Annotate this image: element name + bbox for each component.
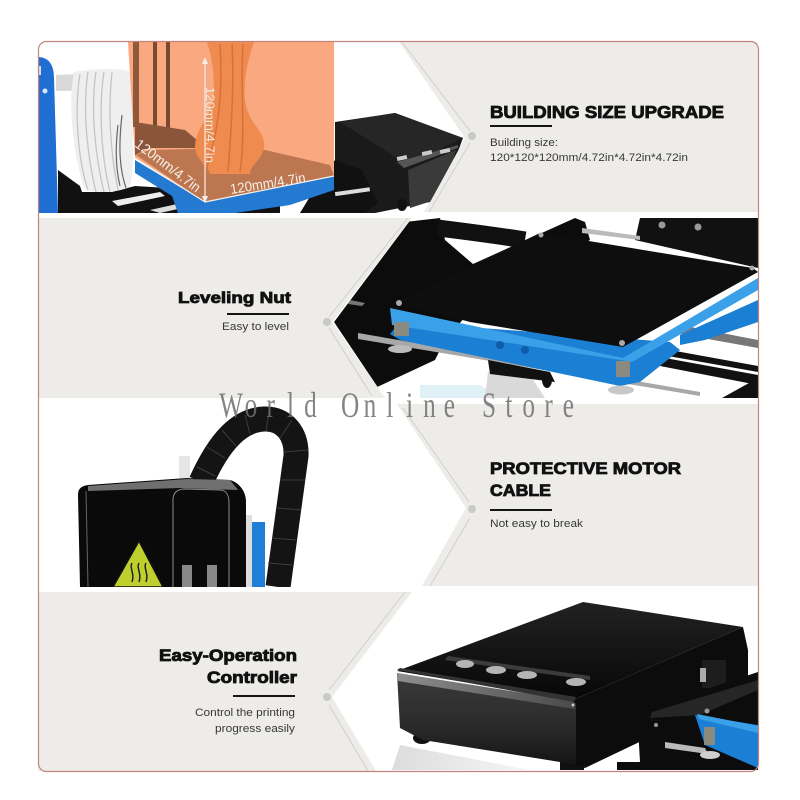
arrow: row 3 pointer: [403, 408, 476, 586]
arrow: row 4 pointer: [323, 592, 405, 771]
heading: easy-operation controller: Controller: [207, 669, 298, 687]
watermark: World Online Store: World Online Store: [219, 385, 574, 425]
heading: protective motor cable: [490, 460, 681, 500]
photo: leveling bed: [334, 218, 758, 398]
panel background: row 3: [397, 404, 758, 586]
label: height dimension: 120mm/4.7in: [203, 87, 217, 163]
panel: easy-operation controller: [38, 592, 758, 771]
arrow: row 2 pointer: [323, 218, 408, 396]
panel: building size upgrade: [38, 42, 758, 213]
label: width dimension: 120mm/4.7in: [229, 169, 307, 197]
chart: vertical dimension line: [135, 57, 334, 203]
panel background: row 1: [399, 42, 758, 212]
heading: protective motor cable: CABLE: [490, 482, 551, 500]
photo: controller with cable: [78, 407, 308, 587]
heading: easy-operation controller: Easy-Operation: [159, 647, 297, 665]
text: not easy to break: Not easy to break: [490, 518, 584, 530]
text: building size: Building size:: [490, 137, 558, 149]
label: depth dimension: 120mm/4.7in: [132, 136, 204, 195]
heading: protective motor cable: PROTECTIVE MOTOR: [490, 460, 681, 478]
divider bar: row 2: [227, 313, 289, 315]
heading: building size upgrade: BUILDING SIZE UPGRADE: [490, 102, 724, 122]
icon: protective cable: [197, 407, 308, 587]
panel: leveling nut: [38, 218, 758, 398]
text: control the printing: progress easily: [215, 723, 296, 735]
panel background: row 2: [38, 218, 412, 398]
panel background: row 4: [38, 592, 412, 771]
divider bar: row 4: [233, 695, 295, 697]
panel: protective motor cable: [78, 404, 758, 587]
heading: leveling nut: Leveling Nut: [178, 290, 292, 307]
divider bar: row 3: [490, 509, 552, 511]
heading: easy-operation controller: [159, 647, 298, 687]
photo: printer with build volume: [38, 42, 463, 213]
text: control the printing: [195, 707, 296, 735]
arrow: row 1 pointer: [402, 42, 476, 212]
text: control the printing: Control the printing: [195, 707, 295, 719]
photo: controller box: [392, 602, 758, 771]
text: building dimensions: 120*120*120mm/4.72in*4.72in*4.72in: [490, 152, 688, 164]
icon: heat warning triangle: [113, 541, 163, 587]
divider bar: row 1: [490, 125, 552, 127]
text: easy to level: Easy to level: [222, 321, 289, 333]
